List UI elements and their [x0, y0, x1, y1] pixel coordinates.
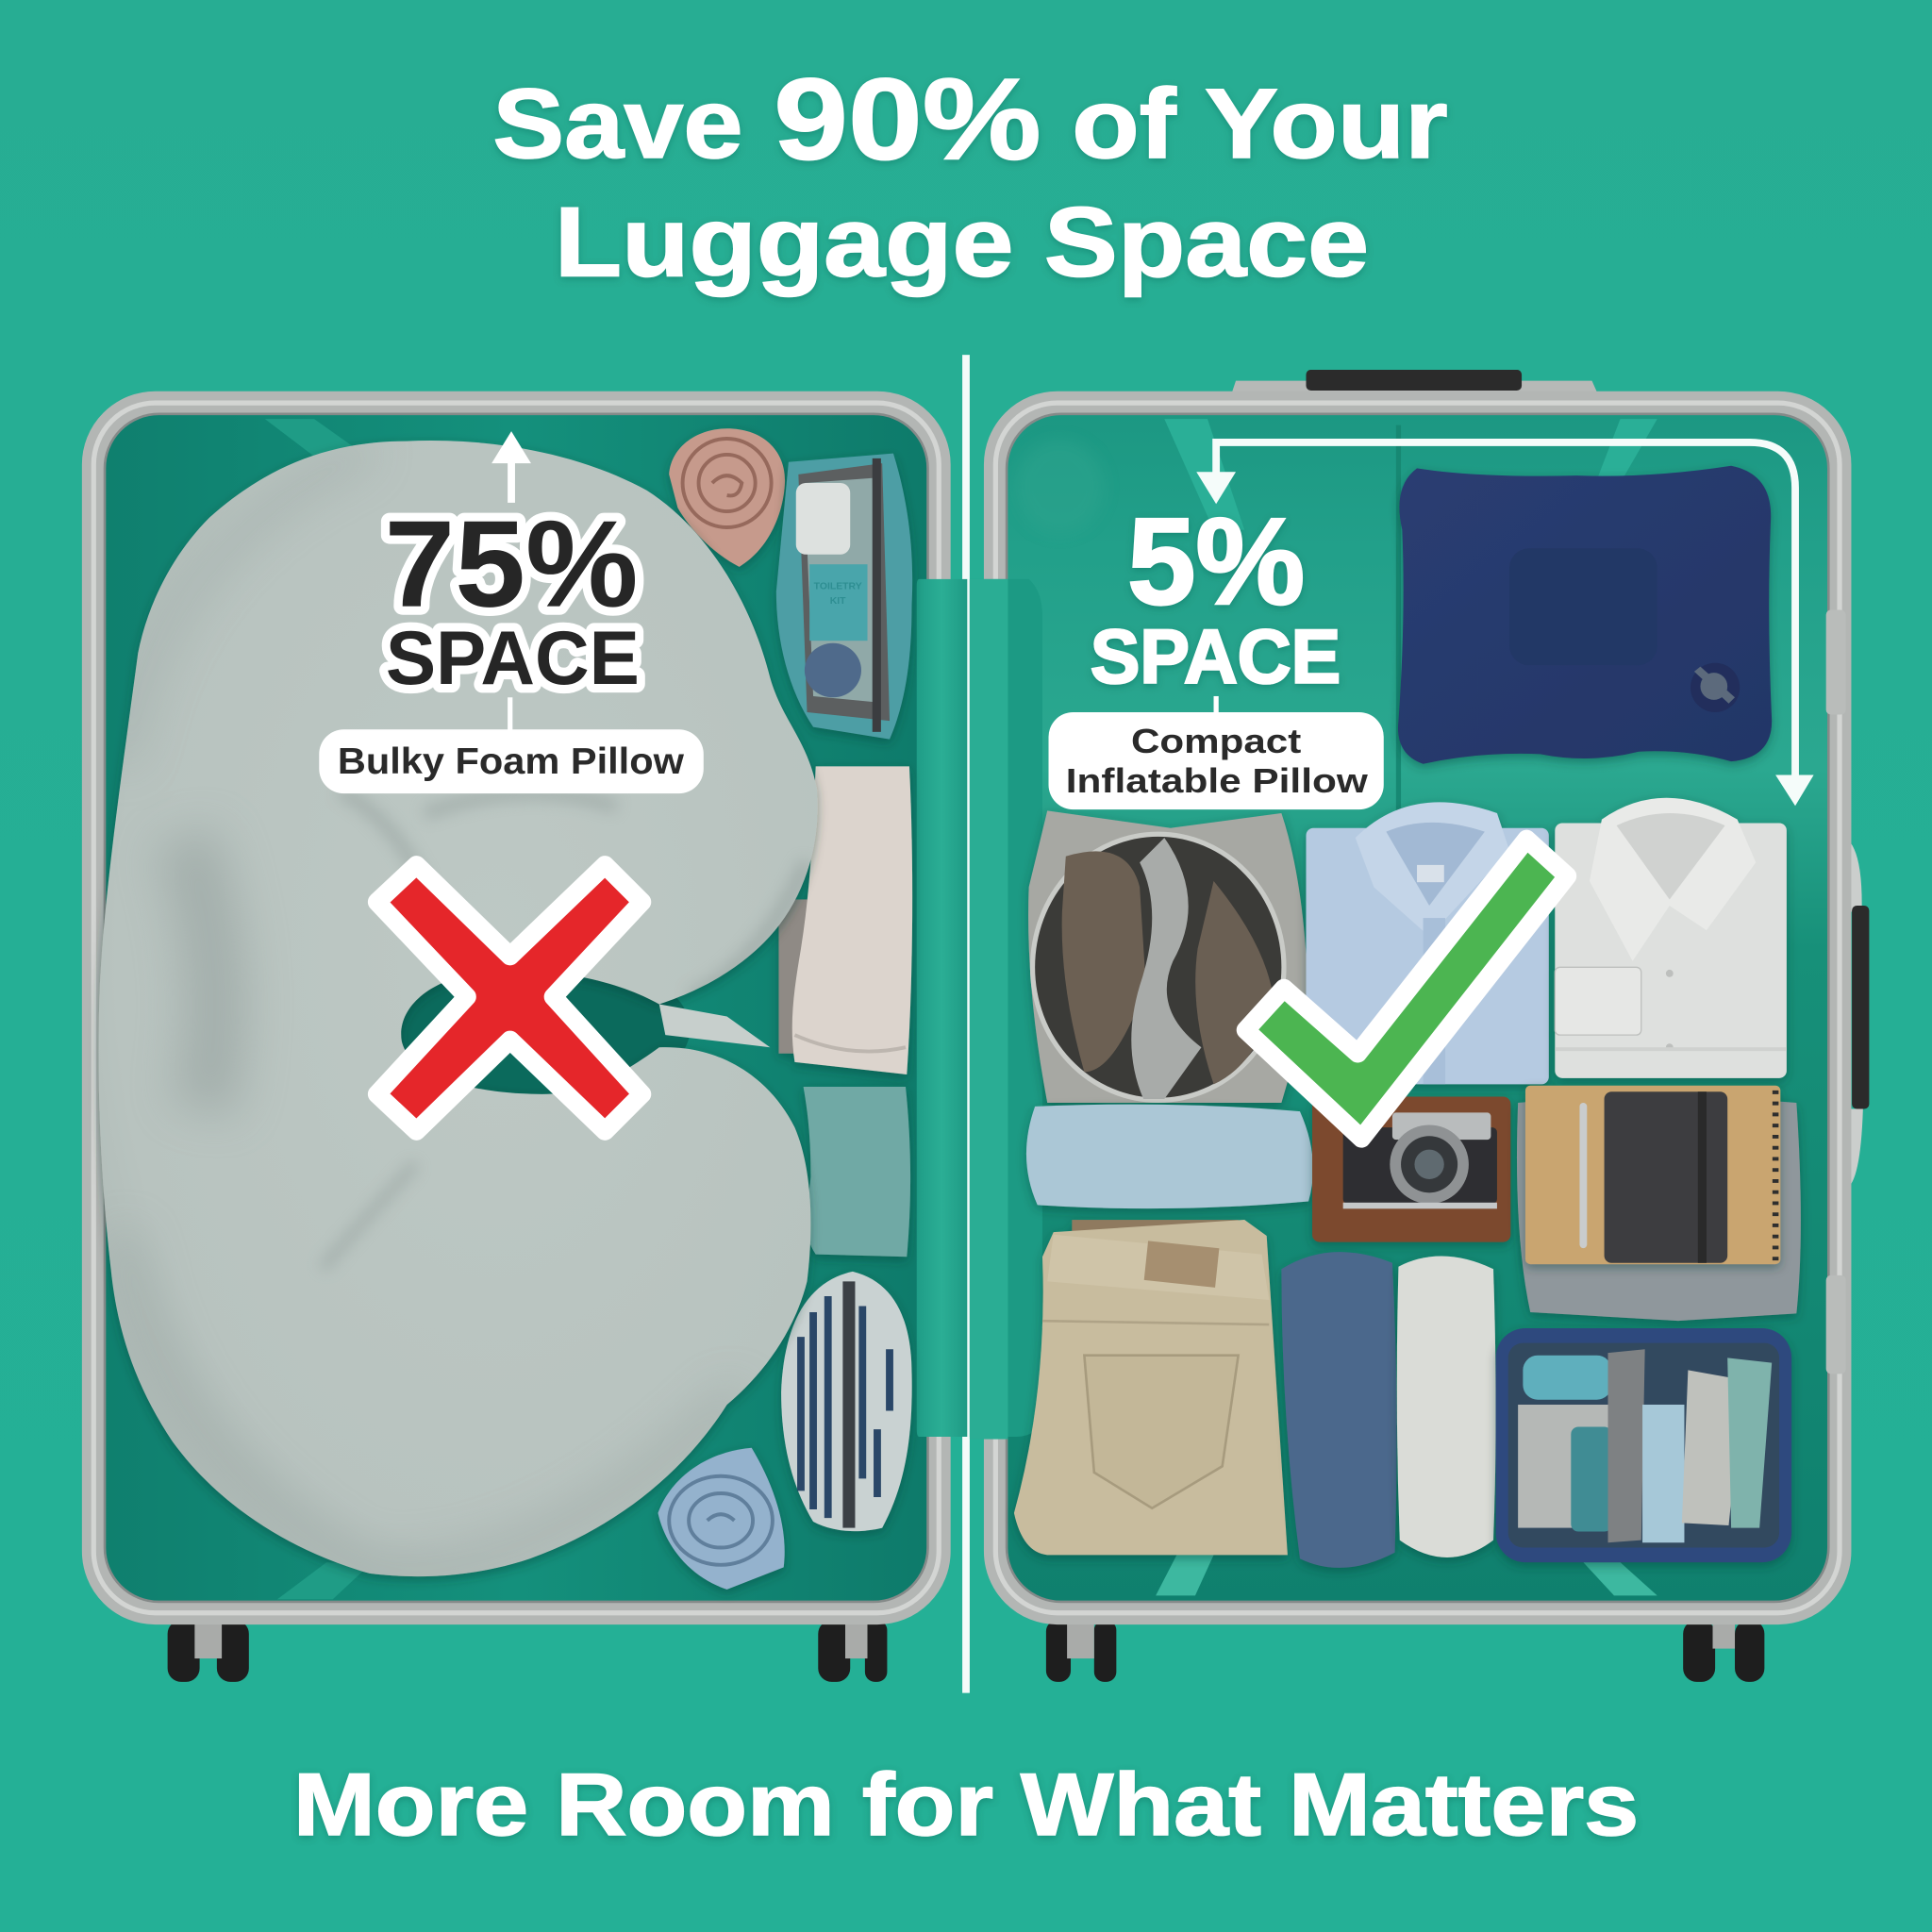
- 5% label: [1091, 492, 1341, 700]
- 5% label: 5%: [1127, 492, 1305, 630]
- white shirt: [1555, 798, 1787, 1078]
- inflatable pillow: [1398, 466, 1772, 764]
- white rolled clothes: [1397, 1257, 1496, 1557]
- label pill: bulky foam pillow: [319, 729, 704, 793]
- icon: green check mark: [1245, 839, 1567, 1139]
- top handle: [1232, 370, 1597, 391]
- side handle: [1846, 838, 1869, 1189]
- icon: red cross: [377, 865, 641, 1131]
- wheels right: [1046, 1617, 1764, 1682]
- latches: [1826, 610, 1846, 1374]
- navy rolled clothes: [1281, 1252, 1397, 1568]
- light blue rolled clothes: [1026, 1105, 1313, 1208]
- label pill: bulky foam pillow: Bulky Foam Pillow: [338, 741, 684, 782]
- teal folded clothes: [804, 1087, 910, 1257]
- connector: [508, 697, 512, 734]
- neck hole: [382, 953, 690, 1106]
- panel: bulky foam pillow suitcase: [93, 403, 967, 1682]
- camera on leather: [1312, 1096, 1510, 1242]
- toiletry bag top: [776, 454, 912, 740]
- suitcase frame left: [93, 403, 939, 1613]
- bulky foam neck pillow: [98, 441, 818, 1576]
- title: Save: [492, 69, 743, 179]
- 75% label: [385, 495, 640, 701]
- rolled blue towel: [658, 1448, 785, 1590]
- pillow center panel: [1509, 548, 1657, 665]
- suitcase wheels left: [168, 1617, 887, 1682]
- toiletry bag top: TOILETRY: [814, 581, 862, 591]
- 5% label: SPACE: [1091, 615, 1341, 700]
- khaki pants: [1014, 1220, 1288, 1555]
- interior right: [991, 407, 1840, 1609]
- title: [492, 55, 1448, 298]
- 75% label: 75%: [385, 495, 639, 633]
- title: of Your: [1072, 69, 1448, 179]
- 75% label: SPACE: [386, 616, 640, 701]
- straps left: [265, 419, 370, 1599]
- interior seams and straps: [1015, 419, 1657, 1595]
- patterned pouch: [781, 1272, 912, 1531]
- connector: [1214, 696, 1219, 716]
- divider line: [962, 355, 970, 1693]
- rolled pink towel: [669, 428, 785, 567]
- pillow clip: [659, 1004, 770, 1047]
- blue shirt: [1306, 802, 1549, 1084]
- toiletry bag top: KIT: [830, 596, 846, 607]
- gray folded sweater: [1517, 1096, 1801, 1321]
- panel: compact inflatable pillow suitcase: [970, 370, 1869, 1682]
- kraft notebook with pen: [1525, 1086, 1780, 1264]
- zipper flap right: [970, 579, 1042, 1440]
- title: Luggage Space: [555, 188, 1369, 298]
- mesh toiletry organizer: [1496, 1328, 1791, 1562]
- white bent arrow: [1196, 442, 1814, 806]
- zipper flap left: [917, 579, 967, 1437]
- footer tagline: More Room for What Matters: [293, 1755, 1639, 1854]
- suitcase frame right: [995, 403, 1840, 1613]
- title: 90%: [774, 55, 1041, 184]
- label pill: compact inflatable pillow: Compact: [1131, 722, 1301, 760]
- label pill: compact inflatable pillow: [1049, 712, 1384, 809]
- cream rolled clothes: [778, 766, 912, 1074]
- air valve: [1690, 663, 1740, 712]
- label pill: compact inflatable pillow: Inflatable Pillow: [1066, 761, 1368, 800]
- shoe bag: [1028, 810, 1308, 1103]
- suitcase interior left: [98, 407, 934, 1609]
- pillow shading: [158, 793, 809, 1575]
- arrow up: [491, 431, 531, 503]
